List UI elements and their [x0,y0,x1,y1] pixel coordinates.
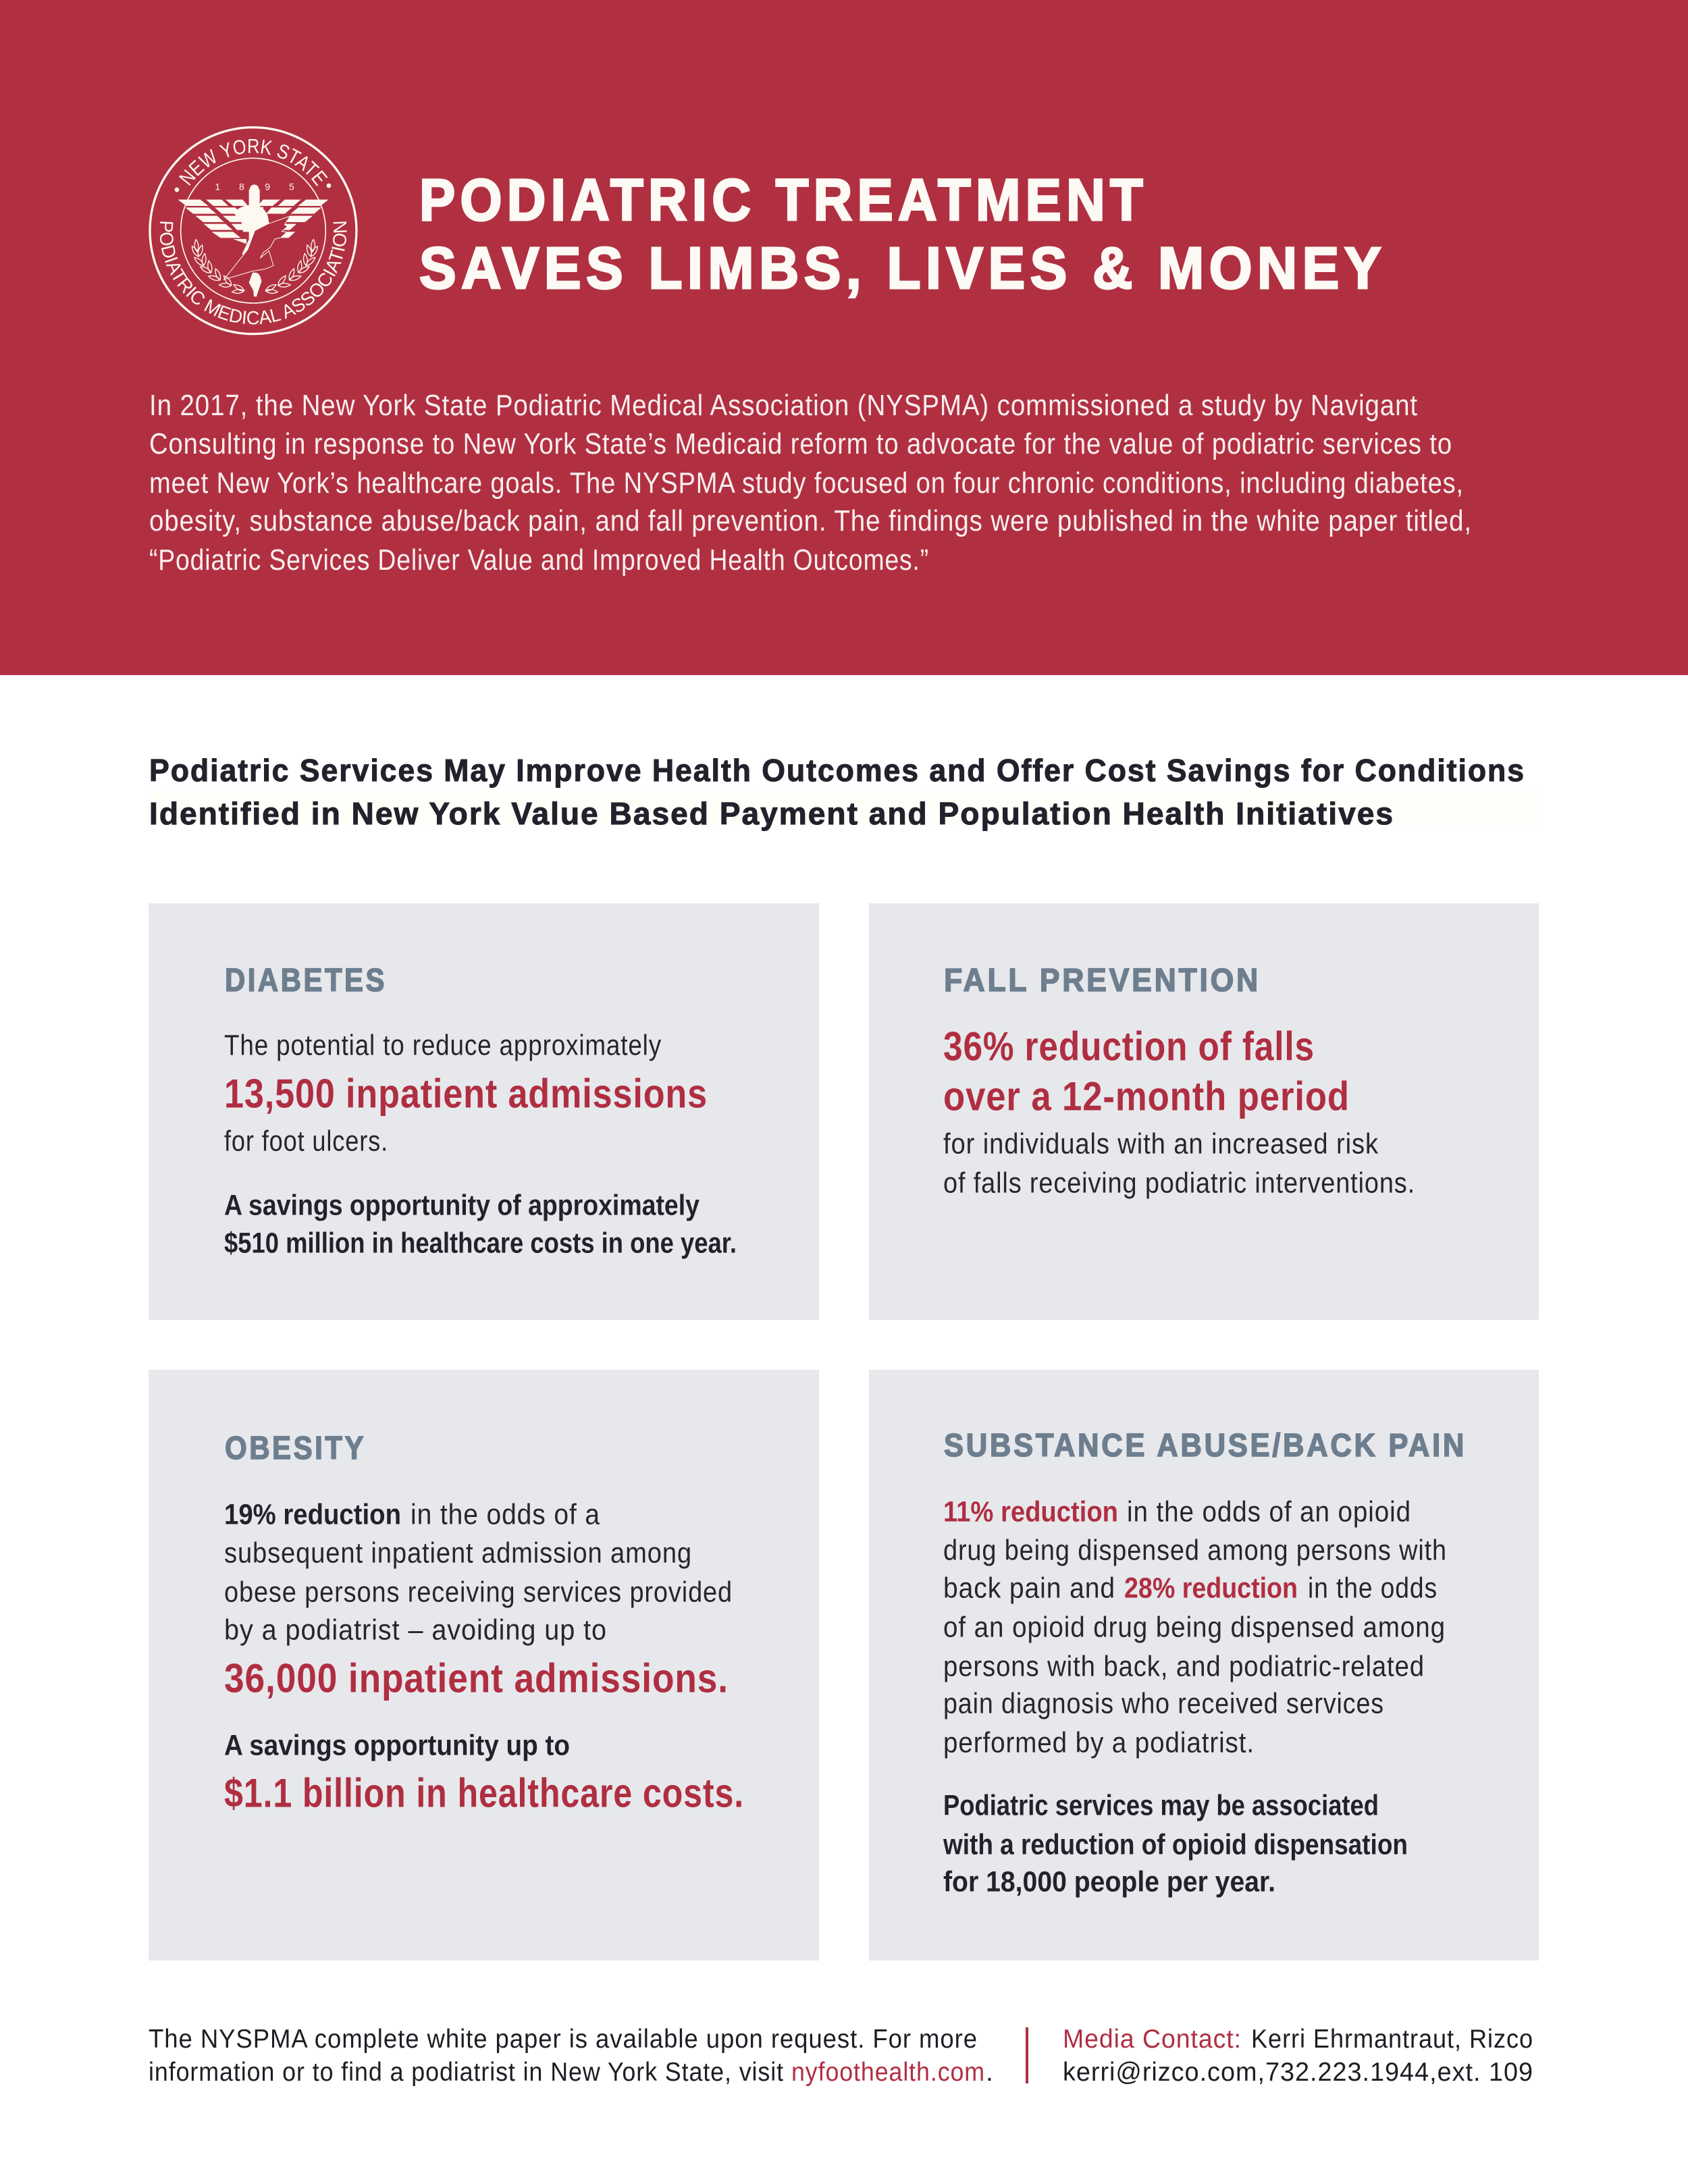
footer divider [1026,2027,1028,2083]
logo: New York State Podiatric Medical Association seal: 8 [239,182,244,192]
obesity text: A savings opportunity up to [224,1730,570,1762]
intro paragraph [149,389,1472,577]
section heading [149,753,1525,831]
obesity text: 36,000 inpatient admissions. [224,1655,729,1701]
intro paragraph: “Podiatric Services Deliver Value and Improved Health Outcomes.” [149,543,929,577]
fall prevention text: over a 12-month period [943,1073,1350,1119]
footer: media contact: kerri@rizco.com,732.223.1944,ext. 109 [1063,2058,1533,2087]
fall prevention text: 36% reduction of falls [943,1023,1315,1069]
panel: substance abuse / back pain [869,1370,1539,1961]
substance abuse text: back pain and [943,1572,1115,1604]
substance abuse text: 28% reduction [1124,1572,1298,1604]
fall prevention text [943,1023,1415,1199]
section heading: Podiatric Services May Improve Health Outcomes and Offer Cost Savings for Conditions [149,753,1525,788]
logo: New York State Podiatric Medical Association seal: PODIATRIC MEDICAL ASSOCIATION [159,221,347,325]
substance abuse text: pain diagnosis who received services [943,1688,1384,1720]
heading: substance abuse / back pain: SUBSTANCE ABUSE/BACK PAIN [944,1428,1467,1464]
diabetes text: $510 million in healthcare costs in one year. [224,1227,737,1260]
substance abuse text: 11% reduction [943,1496,1118,1528]
intro paragraph: Consulting in response to New York State’s Medicaid reform to advocate for the value of podiatric services to [149,427,1452,460]
heading: diabetes: DIABETES [225,963,387,998]
substance abuse text: of an opioid drug being dispensed among [943,1611,1446,1643]
logo: New York State Podiatric Medical Association seal: 1 [215,182,220,192]
heading: obesity: OBESITY [225,1431,366,1466]
substance abuse text [943,1496,1447,1898]
footer: white paper note: nyfoothealth.com [791,2058,985,2087]
obesity text: by a podiatrist – avoiding up to [224,1614,607,1646]
footer: white paper note: information or to find a podiatrist in New York State, visit [149,2058,784,2087]
panel: diabetes [149,903,819,1320]
title: SAVES LIMBS, LIVES & MONEY [419,236,1386,301]
panel: obesity [149,1370,819,1961]
panel: fall prevention [869,903,1539,1320]
substance abuse text: persons with back, and podiatric-related [943,1650,1425,1682]
footer: white paper note [149,2025,994,2087]
substance abuse text: performed by a podiatrist. [943,1727,1255,1759]
footer: white paper note: The NYSPMA complete white paper is available upon request. For more [149,2025,978,2054]
title [419,167,1386,301]
header band [0,0,1688,675]
icon: caduceus staff and globe [234,184,269,296]
substance abuse text: for 18,000 people per year. [943,1866,1275,1898]
substance abuse text: Podiatric services may be associated [943,1789,1379,1821]
diabetes text: 13,500 inpatient admissions [224,1071,708,1117]
diabetes text: A savings opportunity of approximately [224,1190,700,1222]
intro paragraph: meet New York’s healthcare goals. The NYSPMA study focused on four chronic conditions, including diabetes, [149,467,1464,500]
logo: New York State Podiatric Medical Association seal: NEW YORK STATE [179,139,328,186]
intro paragraph: In 2017, the New York State Podiatric Medical Association (NYSPMA) commissioned a study by Navigant [149,389,1418,422]
footer: media contact: Kerri Ehrmantraut, Rizco [1251,2025,1533,2054]
fall prevention text: for individuals with an increased risk [943,1127,1379,1160]
logo: New York State Podiatric Medical Association seal: 5 [289,182,294,192]
substance abuse text: in the odds [1308,1572,1438,1604]
diabetes text: The potential to reduce approximately [224,1029,662,1061]
obesity text: in the odds of a [411,1499,600,1531]
diabetes text [224,1029,737,1260]
logo: New York State Podiatric Medical Association seal: 9 [265,182,270,192]
heading: fall prevention: FALL PREVENTION [944,963,1261,998]
intro paragraph: obesity, substance abuse/back pain, and fall prevention. The findings were published in the white paper titled, [149,504,1472,537]
title: PODIATRIC TREATMENT [419,167,1148,233]
obesity text: obese persons receiving services provided [224,1576,733,1608]
footer: white paper note: . [986,2058,994,2087]
icon: wing stripes [178,200,329,244]
obesity text [224,1499,744,1816]
substance abuse text: drug being dispensed among persons with [943,1534,1447,1566]
obesity text: subsequent inpatient admission among [224,1537,692,1569]
substance abuse text: with a reduction of opioid dispensation [943,1828,1408,1861]
icon: laurel wreath [190,239,319,294]
obesity text: 19% reduction [224,1499,401,1531]
substance abuse text: in the odds of an opioid [1127,1496,1411,1528]
section heading: Identified in New York Value Based Payment and Population Health Initiatives [149,796,1394,831]
footer: media contact: Media Contact: [1063,2025,1242,2054]
icon: Hermes winged head silhouette [224,216,290,279]
diabetes text: for foot ulcers. [224,1125,388,1157]
fall prevention text: of falls receiving podiatric interventions. [943,1167,1415,1199]
obesity text: $1.1 billion in healthcare costs. [224,1770,744,1816]
logo: New York State Podiatric Medical Association seal [149,126,358,335]
footer: media contact [1063,2025,1533,2087]
